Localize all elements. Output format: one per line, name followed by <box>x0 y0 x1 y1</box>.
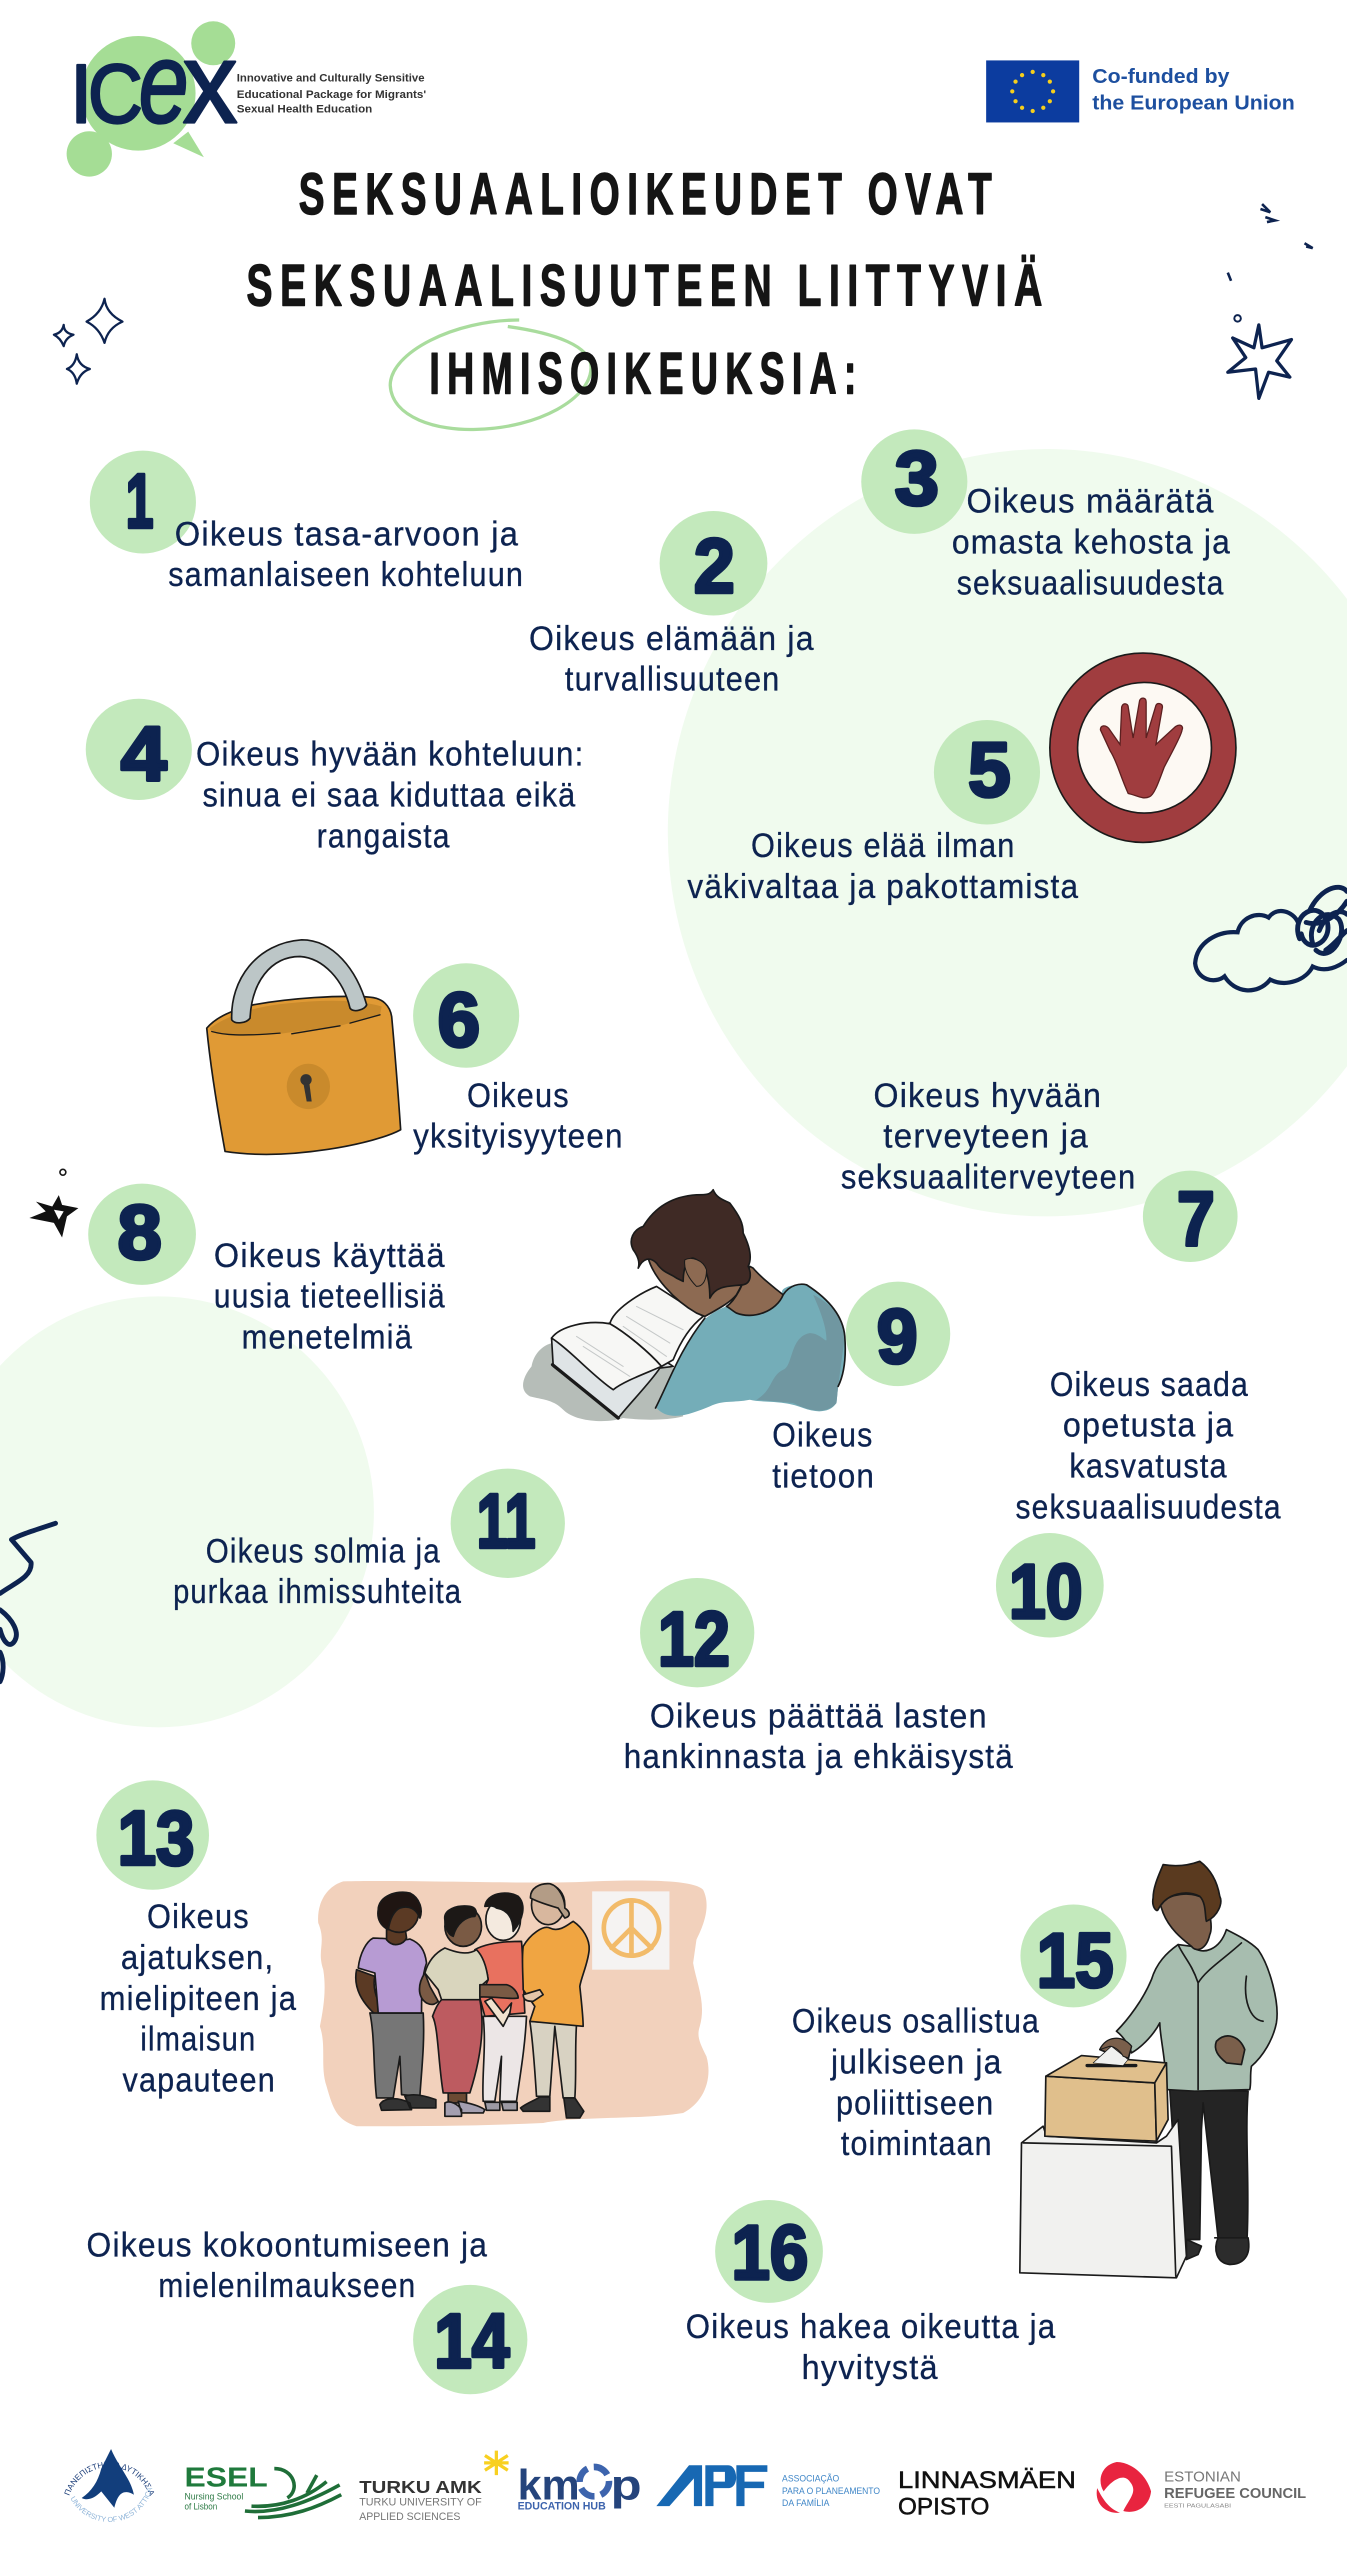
text 4 <box>196 736 585 855</box>
text 10 <box>1016 1366 1282 1526</box>
text 16: Oikeus hakea oikeutta ja <box>686 2308 1056 2346</box>
decoration: star near 8 <box>29 1169 78 1238</box>
logo: ESEL: Nursing School <box>185 2492 243 2502</box>
text 15: Oikeus osallistua <box>792 2003 1040 2041</box>
text 6: Oikeus <box>467 1077 570 1115</box>
number 13 <box>96 1780 209 1890</box>
text 12 <box>624 1697 1014 1776</box>
logo: Linnasmäen Opisto <box>898 2467 1076 2520</box>
number 14 <box>413 2285 527 2394</box>
logo: Turku AMK: TURKU UNIVERSITY OF <box>359 2496 482 2508</box>
text 11: Oikeus solmia ja <box>206 1532 441 1570</box>
background circle: left <box>0 1296 374 1727</box>
number 13: 13 <box>118 1796 194 1881</box>
text 13: ajatuksen, <box>121 1939 274 1977</box>
logo: Turku AMK <box>359 2451 509 2523</box>
text 6: yksityisyyteen <box>413 1118 624 1156</box>
number 8: 8 <box>118 1191 162 1276</box>
text 4: rangaista <box>317 817 451 855</box>
decoration: sparkles left <box>54 299 122 384</box>
text 1: samanlaiseen kohteluun <box>168 556 524 594</box>
text 3 <box>952 483 1231 602</box>
text 8: uusia tieteellisiä <box>214 1278 446 1316</box>
title circle accent <box>390 320 591 430</box>
number 11 <box>451 1469 565 1578</box>
illustration: group of people <box>318 1881 709 2126</box>
number 1: 1 <box>126 459 153 544</box>
number 10: 10 <box>1009 1550 1082 1635</box>
logo: ICEX: C <box>88 48 143 141</box>
text 15: toimintaan <box>841 2125 993 2163</box>
logo: KMOP: p <box>611 2462 642 2509</box>
text 9: Oikeus <box>772 1417 873 1455</box>
text 3: omasta kehosta ja <box>952 523 1231 561</box>
logo: APF: PARA O PLANEAMENTO <box>782 2486 880 2496</box>
text 12: Oikeus päättää lasten <box>650 1697 988 1735</box>
text 8: Oikeus käyttää <box>214 1237 446 1275</box>
number 10 <box>996 1533 1104 1638</box>
number 15: 15 <box>1037 1919 1114 2004</box>
text 3: seksuaalisuudesta <box>957 564 1225 602</box>
text 13: vapauteen <box>122 2061 276 2099</box>
logo: Linnasmäen Opisto: LINNASMÄEN <box>898 2467 1076 2494</box>
number 15 <box>1020 1904 1127 2007</box>
logo: ICEX: Innovative and Culturally Sensitive <box>237 73 425 85</box>
number 6 <box>413 963 519 1068</box>
text 2 <box>529 620 815 699</box>
logo: ICEX <box>67 20 426 177</box>
logo: Estonian Refugee Council: EESTI PAGULASABI <box>1164 2504 1232 2510</box>
text 16: hyvitystä <box>802 2349 939 2387</box>
logo: Linnasmäen Opisto: OPISTO <box>898 2493 989 2520</box>
text 11 <box>173 1532 462 1611</box>
number 16 <box>715 2200 823 2303</box>
logo: University of West Attica: UNIVERSITY OF WEST ATTICA <box>71 2488 152 2522</box>
number 1 <box>90 451 196 553</box>
logo: KMOP: EDUCATION HUB <box>518 2500 606 2512</box>
text 10: seksuaalisuudesta <box>1016 1488 1282 1526</box>
text 13 <box>100 1898 297 2099</box>
logo: University of West Attica: ΠΑΝΕΠΙΣΤΗΜΙΟ ΔΥΤΙΚΗΣ ΑΤΤΙΚΗΣ <box>64 2462 154 2496</box>
number 3 <box>861 429 967 534</box>
text 7 <box>841 1077 1136 1197</box>
logo: Estonian Refugee Council: REFUGEE COUNCIL <box>1164 2486 1306 2502</box>
text 15: julkiseen ja <box>830 2043 1002 2081</box>
text 7: terveyteen ja <box>883 1118 1089 1156</box>
text 5: väkivaltaa ja pakottamista <box>687 868 1079 906</box>
logo: EU co-funded: Co-funded by <box>1092 66 1230 88</box>
logo: Estonian Refugee Council <box>1097 2462 1306 2513</box>
text 14: mielenilmaukseen <box>158 2267 416 2305</box>
logo: ICEX: I <box>70 48 93 141</box>
text 15 <box>792 2003 1040 2163</box>
text 8 <box>214 1237 446 1357</box>
decoration: cloud scribble <box>1195 887 1347 990</box>
number 4 <box>86 699 192 800</box>
logo: ESEL <box>185 2462 341 2518</box>
number 2 <box>660 511 767 616</box>
text 10: kasvatusta <box>1069 1448 1228 1486</box>
number 8 <box>88 1184 196 1285</box>
text 14: Oikeus kokoontumiseen ja <box>87 2226 488 2264</box>
text 7: seksuaaliterveyteen <box>841 1159 1136 1197</box>
logo: ICEX: Educational Package for Migrants' <box>237 89 426 101</box>
number 12 <box>640 1578 754 1687</box>
logo: ESEL: ESEL <box>185 2462 268 2493</box>
text 9 <box>772 1417 875 1495</box>
text 1: Oikeus tasa-arvoon ja <box>175 515 519 553</box>
number 5: 5 <box>968 729 1011 814</box>
logo: EU co-funded <box>986 60 1295 122</box>
logo: ESEL: of Lisbon <box>185 2501 217 2511</box>
logo: APF: DA FAMÍLIA <box>782 2498 829 2508</box>
number 12: 12 <box>658 1597 730 1682</box>
background circle: right <box>668 449 1347 1216</box>
number 9: 9 <box>877 1295 918 1380</box>
illustration: person voting <box>1020 1861 1277 2278</box>
logo: KMOP: km <box>518 2462 580 2509</box>
text 9: tietoon <box>772 1457 875 1495</box>
decoration: star right <box>1228 204 1313 398</box>
number 16: 16 <box>731 2211 808 2296</box>
illustration: person reading <box>523 1190 845 1421</box>
logo: APF <box>656 2465 880 2508</box>
number 2: 2 <box>694 525 735 610</box>
number 14: 14 <box>434 2299 510 2384</box>
logo: EU co-funded: the European Union <box>1092 92 1295 114</box>
text 16 <box>686 2308 1056 2387</box>
title <box>247 162 1050 406</box>
title: IHMISOIKEUKSIA: <box>429 341 864 406</box>
text 4: Oikeus hyvään kohteluun: <box>196 736 585 774</box>
number 7 <box>1143 1171 1238 1263</box>
text 3: Oikeus määrätä <box>967 483 1215 521</box>
text 13: Oikeus <box>147 1898 250 1936</box>
text 6 <box>413 1077 624 1156</box>
number 3: 3 <box>895 436 939 521</box>
text 11: purkaa ihmissuhteita <box>173 1573 462 1611</box>
text 13: mielipiteen ja <box>100 1980 297 2018</box>
logo: Estonian Refugee Council: ESTONIAN <box>1164 2470 1241 2486</box>
logo: ICEX: x <box>183 20 238 148</box>
number 6: 6 <box>438 979 480 1064</box>
text 13: ilmaisun <box>140 2021 256 2059</box>
text 12: hankinnasta ja ehkäisystä <box>624 1738 1014 1776</box>
logo: KMOP <box>518 2462 642 2512</box>
text 5 <box>687 827 1079 906</box>
icon: stop hand <box>1050 653 1236 842</box>
text 4: sinua ei saa kiduttaa eikä <box>202 777 576 815</box>
logo: Turku AMK: TURKU AMK <box>359 2477 482 2497</box>
logo: University of West Attica <box>64 2449 154 2522</box>
logo: ICEX: Sexual Health Education <box>237 104 372 116</box>
text 10: opetusta ja <box>1063 1407 1234 1445</box>
number 9 <box>846 1282 950 1386</box>
text 14 <box>87 2226 488 2305</box>
number 7: 7 <box>1177 1178 1215 1263</box>
text 8: menetelmiä <box>242 1319 413 1357</box>
text 15: poliittiseen <box>836 2084 994 2122</box>
logo: APF: ASSOCIAÇÃO <box>782 2474 839 2484</box>
text 7: Oikeus hyvään <box>874 1077 1102 1115</box>
number 4: 4 <box>121 712 167 797</box>
icon: padlock <box>207 940 401 1154</box>
text 10: Oikeus saada <box>1050 1366 1249 1404</box>
text 5: Oikeus elää ilman <box>751 827 1016 865</box>
text 1 <box>168 515 524 594</box>
text 2: turvallisuuteen <box>565 661 780 699</box>
logo: ICEX: e <box>139 20 189 148</box>
number 11: 11 <box>477 1480 536 1565</box>
title: SEKSUAALIOIKEUDET OVAT <box>299 162 999 227</box>
decoration: squiggle left <box>0 1523 56 1682</box>
text 2: Oikeus elämään ja <box>529 620 815 658</box>
logo: Turku AMK: APPLIED SCIENCES <box>359 2511 461 2523</box>
number 5 <box>934 720 1040 824</box>
